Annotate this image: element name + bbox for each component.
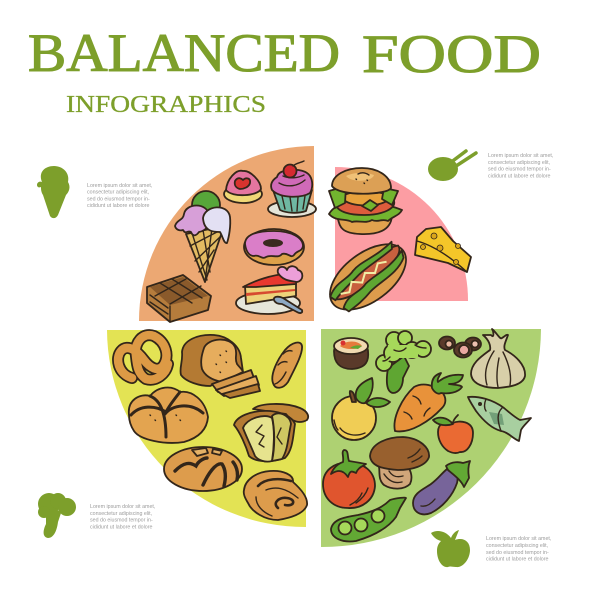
broccoli	[376, 331, 431, 393]
title	[28, 23, 541, 84]
pretzel	[118, 335, 168, 380]
donut	[244, 229, 304, 265]
subtitle: INFOGRAPHICS	[66, 92, 266, 118]
title: BALANCED	[28, 23, 340, 83]
text: fast food: Lorem ipsum dolor sit amet,	[488, 153, 553, 159]
text: sweets: Lorem ipsum dolor sit amet,	[87, 183, 152, 189]
heart cookie	[224, 171, 262, 203]
garlic	[471, 329, 525, 388]
fish	[468, 397, 531, 441]
text: bread: sed do eiusmod tempor in-	[90, 518, 153, 524]
text: vegetables: Lorem ipsum dolor sit amet,	[486, 536, 551, 542]
icon: ice cream silhouette	[37, 166, 69, 218]
text: bread: consectetur adipiscing elit,	[90, 511, 152, 517]
text: sweets: consectetur adipiscing elit,	[87, 190, 149, 196]
cake slice on plate	[236, 266, 302, 314]
baguette	[272, 343, 302, 388]
panel: fast food quarter	[318, 167, 471, 323]
panel: bread quarter	[107, 330, 308, 527]
swiss roll	[244, 471, 307, 520]
tomato	[323, 450, 375, 508]
text: bread: cididunt ut labore et dolore	[90, 524, 152, 530]
text: vegetables: consectetur adipiscing elit,	[486, 543, 548, 549]
text: vegetables: sed do eiusmod tempor in-	[486, 550, 549, 556]
quince fruit	[332, 378, 390, 440]
text: fast food: sed do eiusmod tempor in-	[488, 167, 551, 173]
toast loaf	[234, 404, 308, 462]
text: fast food: consectetur adipiscing elit,	[488, 160, 550, 166]
round bread	[164, 447, 242, 491]
sushi	[334, 338, 368, 369]
text: vegetables: cididunt ut labore et dolore	[486, 557, 548, 563]
text: sweets: sed do eiusmod tempor in-	[87, 196, 150, 202]
hot dog	[318, 231, 418, 323]
icon: broccoli silhouette	[38, 493, 76, 538]
panel: sweets quarter	[139, 146, 316, 322]
pea pod	[331, 498, 406, 541]
apple	[433, 415, 473, 453]
cheese wedge	[415, 227, 471, 272]
icon: fast food silhouette	[428, 151, 476, 181]
eggplant	[413, 461, 470, 514]
icon: apple silhouette	[431, 530, 470, 567]
ice cream cone	[175, 191, 230, 282]
bun	[129, 387, 208, 443]
hamburger	[329, 168, 402, 234]
mushroom	[370, 437, 429, 489]
sushi rolls	[439, 336, 481, 358]
cupcake	[268, 161, 316, 217]
carrot	[394, 373, 463, 431]
text: sweets: cididunt ut labore et dolore	[87, 203, 149, 209]
panel: vegetables quarter	[321, 329, 541, 547]
sliced loaf	[180, 335, 260, 398]
waffle	[147, 275, 211, 322]
text: bread: Lorem ipsum dolor sit amet,	[90, 504, 155, 510]
title: FOOD	[362, 24, 541, 84]
text: fast food: cididunt ut labore et dolore	[488, 173, 550, 179]
